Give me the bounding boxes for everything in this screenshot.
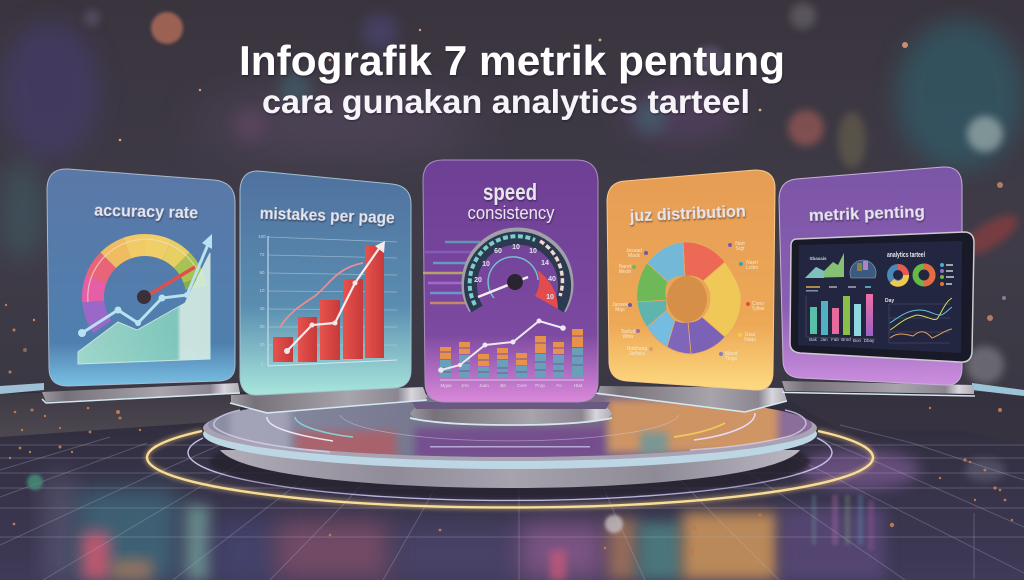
donut labels: Jesaad [626,248,642,254]
donut labels: Tasfud [621,329,636,335]
panel: metrik penting [779,167,975,396]
pink trend line [280,263,363,327]
bar chart: mistakes: 10 [259,288,265,293]
bar chart: mistakes: 20 [259,342,265,347]
speedometer gauge: 10 [529,248,537,255]
dashboard: line chart: Day [885,298,894,304]
speedometer gauge: 60 [494,248,502,255]
donut labels: Bland [725,351,738,357]
floor reflections [45,450,1005,580]
heading: speed consistency: consistency [468,203,554,223]
title: cara gunakan analytics tarteel [262,83,750,120]
heading: speed consistency [468,179,554,223]
dashboard: bar chart [806,286,875,343]
bar chart: mistakes: 0 [261,362,264,367]
trend line with arrow [78,234,212,337]
dashboard: bar chart: Fab [831,337,839,342]
dashboard: bar chart: Bak [809,337,818,342]
white trend line with arrow [284,241,385,354]
dashboard: heading: analytics tarteel [887,252,925,259]
dashboard: bar chart: Dbay [864,338,875,343]
donut chart [637,242,741,354]
motion streaks [423,242,480,303]
dashboard: area chart [805,253,844,278]
donut labels: Cono [752,301,764,307]
glowing rings [147,431,873,507]
donut labels: Nart [735,241,745,247]
donut labels: Mqs [615,307,625,313]
dashboard: bar chart: Brod [841,337,851,342]
platform reflections [230,400,778,460]
bar chart: mistakes: 72 [259,252,265,257]
dashboard: dome chart [850,260,876,278]
bar chart: mistakes: 40 [259,306,265,311]
stacked bar chart: Htat [574,383,583,388]
donut labels: Naret [619,264,632,270]
dashboard: area chart: Sbasais [809,256,827,261]
donut labels: Jarwek [612,302,628,308]
background with bokeh [0,0,1024,400]
panel: juz distribution [595,170,787,412]
donut labels: Srgt [735,246,745,252]
donut labels: Mack [628,253,640,259]
stacked bar chart: Cere [517,383,527,388]
speedometer gauge: 14 [541,260,549,267]
stacked bar chart: Jrrn [461,383,469,388]
donut labels: Nubhang [627,346,647,352]
stacked bar chart: Fo [556,383,562,388]
panel: mistakes per page [230,171,427,413]
speedometer gauge: 20 [474,277,482,284]
donut labels [612,241,765,362]
speedometer gauge: 10 [482,261,490,268]
bar chart: mistakes: 50 [259,270,265,275]
platform light arcs [214,410,806,452]
panel: accuracy rate [42,169,240,403]
heading: juz distribution: juz distribution [628,201,746,226]
heading: metrik penting: metrik penting [809,202,925,225]
dashboard: line chart [885,298,952,343]
heading: mistakes per page: mistakes per page [259,204,395,227]
donut labels: Tlogs [725,356,738,362]
donut labels: Mesh [619,269,631,275]
donut labels: Naqs [744,337,756,343]
central platform [203,393,817,498]
stacked bar chart: Mgas [440,383,452,388]
needle [137,267,195,304]
donut labels: Guul [745,332,755,338]
speedometer gauge: 10 [512,244,520,251]
speedometer gauge: 40 [548,276,556,283]
dashboard: legend [940,263,954,286]
donut labels: Navri [746,260,758,266]
donut labels: Lctini [746,265,758,271]
stacked bar chart [440,329,584,388]
dashboard: donuts [890,266,932,284]
heading: accuracy rate: accuracy rate [94,201,198,222]
donut labels: Wttw [622,334,634,340]
tablet dashboard [790,232,974,362]
speedometer gauge: 10 [546,294,554,301]
stacked bar chart: Juan [479,383,489,388]
bar chart: mistakes: 30 [259,324,265,329]
donut labels: Jerfacs [629,351,646,357]
dashboard: bar chart: Bon [853,338,861,343]
bar chart: mistakes: 100 [258,234,266,239]
donut labels: Tyltas [751,306,765,312]
bar chart: mistakes [258,234,397,367]
heading: speed consistency: speed [483,179,537,205]
gauge: accuracy [88,239,198,327]
speed trend line [438,318,566,373]
title [239,37,785,120]
title: Infografik 7 metrik pentung [239,37,785,84]
stacked bar chart: Bit [500,383,506,388]
panel: speed consistency [410,160,612,425]
dashboard: bar chart: Jan [820,337,828,342]
stage floor with grid and reflections [0,383,1024,580]
area chart [78,253,210,364]
speedometer gauge [464,230,572,311]
stacked bar chart: Prop [535,383,545,388]
